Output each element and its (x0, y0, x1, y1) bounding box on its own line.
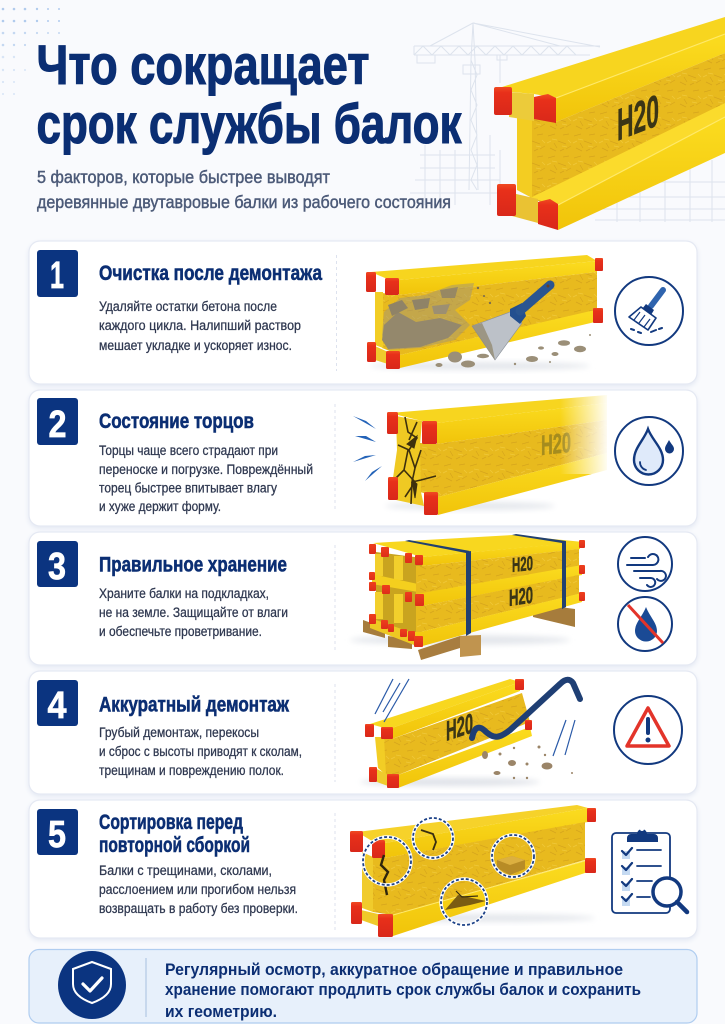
callout text: их геометрию. (165, 1002, 277, 1021)
text 2: переноске и погрузке. Повреждённый (99, 462, 313, 478)
text 2: и хуже держит форму. (99, 499, 221, 515)
number badge 4: 4 (48, 685, 66, 727)
icon: checklist and magnifier (612, 827, 687, 913)
model marking 2: H20 (541, 427, 571, 461)
title: срок службы балок (36, 92, 462, 155)
crowbar (472, 680, 580, 738)
panel: 2 end condition (29, 390, 697, 526)
callout text: Регулярный осмотр, аккуратное обращение и правильное (165, 960, 623, 979)
debris (482, 746, 573, 779)
hero H20 beam (494, 17, 725, 230)
text 1: мешает укладке и ускоряет износ. (99, 338, 292, 354)
text 1: каждого цикла. Налипший раствор (99, 318, 301, 334)
subtitle: деревянные двутавровые балки из рабочего состояния (37, 192, 451, 212)
text 4: Грубый демонтаж, перекосы (99, 725, 259, 741)
beam marking: H20 (617, 84, 659, 151)
number badge 3 (37, 541, 78, 588)
text 2: Торцы чаще всего страдают при (99, 443, 278, 459)
motion lines (375, 679, 575, 756)
model markings 3: H20 (509, 582, 533, 611)
number badge 4 (37, 680, 78, 727)
illustration: beam and crowbar (360, 679, 580, 788)
icon: water drops (615, 417, 683, 485)
number badge 1: 1 (50, 255, 64, 297)
number badge 5 (37, 809, 78, 856)
panel: 4 careful dismantling (29, 671, 697, 794)
text 3: Храните балки на подкладках, (99, 586, 269, 602)
model marking 4: H20 (446, 708, 473, 748)
number badge 5: 5 (48, 814, 66, 856)
text 2 (99, 443, 313, 515)
icon: brush (615, 277, 683, 345)
text 5: расслоением или прогибом нельзя (99, 882, 296, 898)
text 5 (99, 863, 298, 917)
icon: shield (58, 951, 126, 1019)
icon: ventilation (618, 537, 672, 591)
scraper (472, 284, 550, 360)
text 3: и обеспечьте проветривание. (99, 624, 262, 640)
impact marks (353, 416, 382, 481)
panel: 3 storage (29, 532, 697, 665)
title (36, 33, 462, 155)
heading 3: Правильное хранение (99, 552, 287, 576)
text 5: возвращать в работу без проверки. (99, 901, 298, 917)
wooden skids (363, 607, 575, 660)
defect: flange crack (413, 818, 453, 858)
title: Что сокращает (36, 33, 370, 96)
number badge 3: 3 (48, 546, 66, 588)
illustration: beam with cracked end (353, 392, 610, 515)
panel: 5 sorting (29, 800, 697, 938)
subtitle: 5 факторов, которые быстрее выводят (37, 167, 330, 187)
text 5: Балки с трещинами, сколами, (99, 863, 272, 879)
text 1 (99, 299, 301, 354)
model markings 3 (509, 553, 533, 611)
steel caps (369, 540, 585, 647)
subtitle (37, 167, 451, 212)
text 4 (99, 725, 302, 779)
text 2: торец быстрее впитывает влагу (99, 480, 278, 496)
icon: no moisture (618, 597, 672, 651)
panel: 1 cleaning (29, 241, 697, 384)
text 1: Удаляйте остатки бетона после (99, 299, 277, 315)
text 3 (99, 586, 288, 640)
defect: delamination (492, 835, 534, 877)
icon: warning (614, 696, 682, 764)
heading 1: Очистка после демонтажа (99, 261, 323, 285)
callout text: хранение помогают продлить срок службы балок и сохранить (165, 980, 641, 999)
defect: chipped flange (441, 879, 487, 925)
heading 5: повторной сборкой (99, 833, 250, 857)
number badge 1 (37, 250, 78, 297)
callout text (165, 960, 641, 1021)
text 4: и сброс с высоты приводят к сколам, (99, 744, 302, 760)
rubble (436, 334, 591, 368)
illustration: strapped stack on skids (350, 534, 585, 660)
heading 5 (99, 810, 250, 857)
text 3: не на земле. Защищайте от влаги (99, 605, 288, 621)
illustration: beam with concrete and scraper (366, 255, 603, 370)
callout: takeaway banner (29, 950, 697, 1023)
illustration: beam with inspection circles (350, 805, 596, 937)
straps (405, 534, 566, 636)
heading 5: Сортировка перед (99, 810, 243, 834)
cracked end face (393, 416, 436, 506)
number badge 2 (37, 398, 78, 446)
text 4: трещинам и повреждению полок. (99, 763, 284, 779)
defect: web crack (363, 837, 411, 895)
number badge 2: 2 (48, 404, 66, 446)
concrete residue (382, 283, 491, 350)
model markings 3: H20 (512, 553, 533, 577)
heading 2: Состояние торцов (99, 409, 254, 433)
background: crane and scaffolding sketch (410, 23, 725, 222)
decorative dot grid (2, 8, 60, 95)
heading 4: Аккуратный демонтаж (99, 692, 290, 716)
